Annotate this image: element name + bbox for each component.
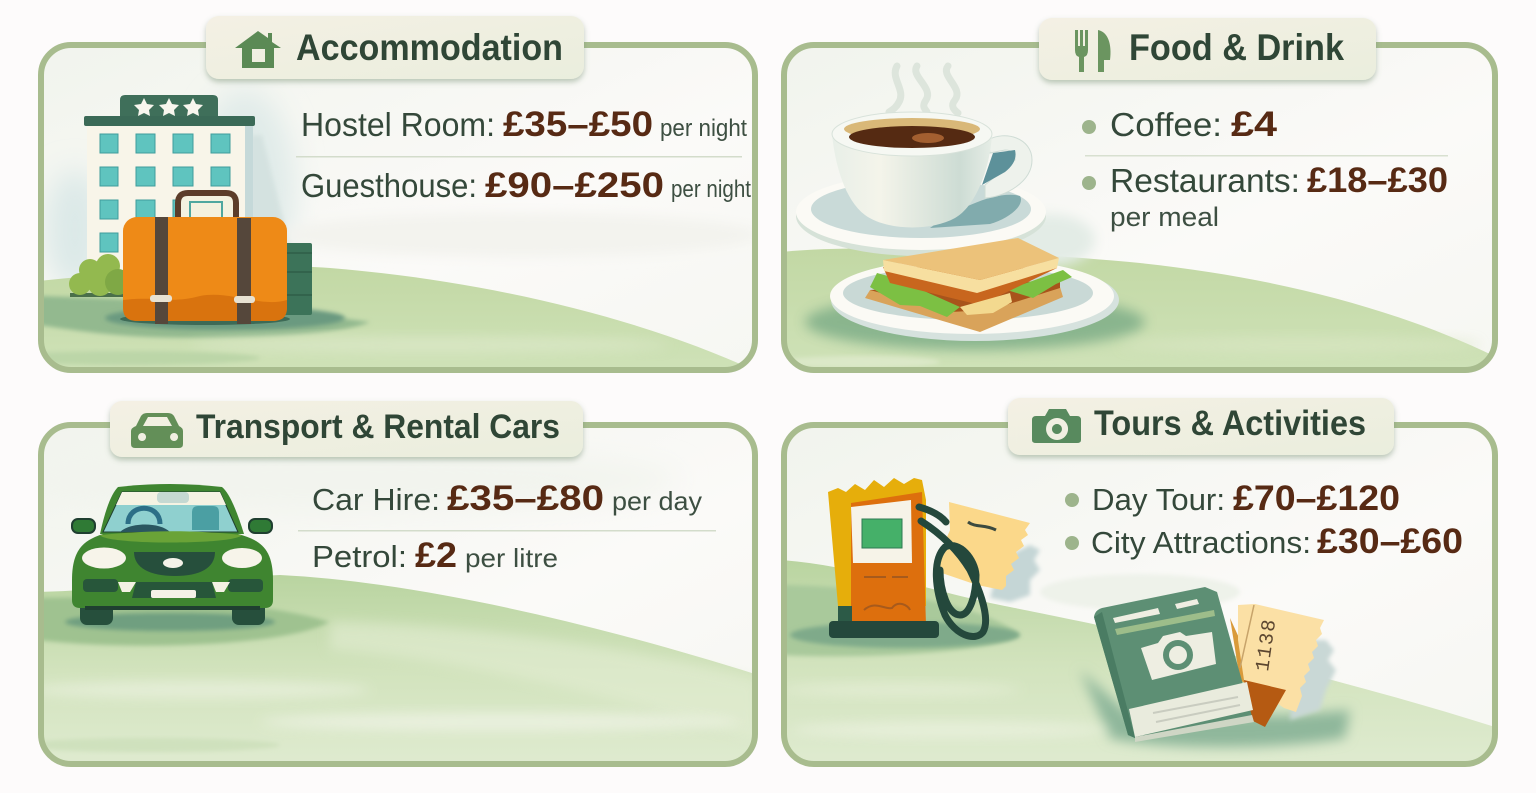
panel: food and drink xyxy=(780,45,1498,373)
heading: transport and rental cars: Transport & Rental Cars xyxy=(196,408,560,446)
icon: green bag xyxy=(284,243,312,315)
heading: accommodation: Accommodation xyxy=(296,27,563,68)
icon: fork and knife xyxy=(1075,30,1110,72)
text: food prices: £4 xyxy=(1231,105,1278,144)
heading: transport and rental cars xyxy=(110,401,583,457)
scene: hillside xyxy=(44,575,752,761)
text: tours prices: Day Tour: xyxy=(1092,482,1225,517)
text: accommodation prices xyxy=(296,105,751,205)
text: food prices: Coffee: xyxy=(1110,106,1222,143)
text: tours prices: City Attractions: xyxy=(1091,525,1311,560)
icon: green car xyxy=(72,484,273,625)
scene: hillside xyxy=(780,248,1498,373)
panel: transport and rental cars xyxy=(20,425,758,767)
icon: tickets and pouch xyxy=(1230,604,1336,727)
text: food prices xyxy=(1082,105,1448,232)
heading: food and drink: Food & Drink xyxy=(1129,27,1344,68)
text: tours prices: £70–£120 xyxy=(1233,479,1400,518)
icon: hotel xyxy=(84,95,255,288)
icon: coffee and saucer xyxy=(796,66,1095,266)
heading: tours and activities: Tours & Activities xyxy=(1094,404,1366,443)
text: transport prices: Car Hire: xyxy=(312,482,440,517)
text: transport prices: £35–£80 xyxy=(447,479,604,518)
panel: tours and activities xyxy=(780,425,1498,767)
text: accommodation prices: per night xyxy=(660,115,747,142)
heading: accommodation xyxy=(206,16,584,79)
text: accommodation prices: £35–£50 xyxy=(503,105,653,144)
text: transport prices: Petrol: xyxy=(312,539,407,574)
text: accommodation prices: per night xyxy=(671,176,751,203)
text: accommodation prices: £90–£250 xyxy=(485,166,664,205)
icon: tickets and pouch: 1138 xyxy=(1252,618,1282,673)
panel border xyxy=(784,425,1495,764)
icon: bush xyxy=(69,254,131,297)
text: transport prices: per day xyxy=(612,486,702,516)
text: accommodation prices: Hostel Room: xyxy=(301,106,495,143)
text: tours prices xyxy=(1065,479,1463,561)
text: food prices: per meal xyxy=(1110,202,1219,232)
panel: accommodation xyxy=(0,45,760,373)
heading: food and drink xyxy=(1039,18,1376,80)
panel border xyxy=(784,45,1495,370)
text: transport prices xyxy=(298,479,716,575)
scene: hillside xyxy=(780,560,1498,767)
heading: tours and activities xyxy=(1008,398,1394,455)
panel border xyxy=(41,425,755,764)
icon: fuel pump xyxy=(828,478,986,638)
scene: hillside xyxy=(0,90,760,373)
text: transport prices: £2 xyxy=(415,536,457,575)
text: food prices: £18–£30 xyxy=(1307,161,1448,200)
icon: suitcase xyxy=(120,193,290,325)
panel border xyxy=(41,45,755,370)
icon: sandwich on plate xyxy=(830,238,1119,341)
icon: ticket behind pump xyxy=(933,502,1040,602)
icon: house xyxy=(235,31,281,68)
text: transport prices: per litre xyxy=(465,543,558,573)
icon: guide book xyxy=(1094,587,1254,742)
text: accommodation prices: Guesthouse: xyxy=(301,167,477,204)
text: food prices: Restaurants: xyxy=(1110,162,1300,199)
icon: car xyxy=(131,413,183,448)
icon: camera xyxy=(1032,409,1081,443)
text: tours prices: £30–£60 xyxy=(1317,522,1463,561)
